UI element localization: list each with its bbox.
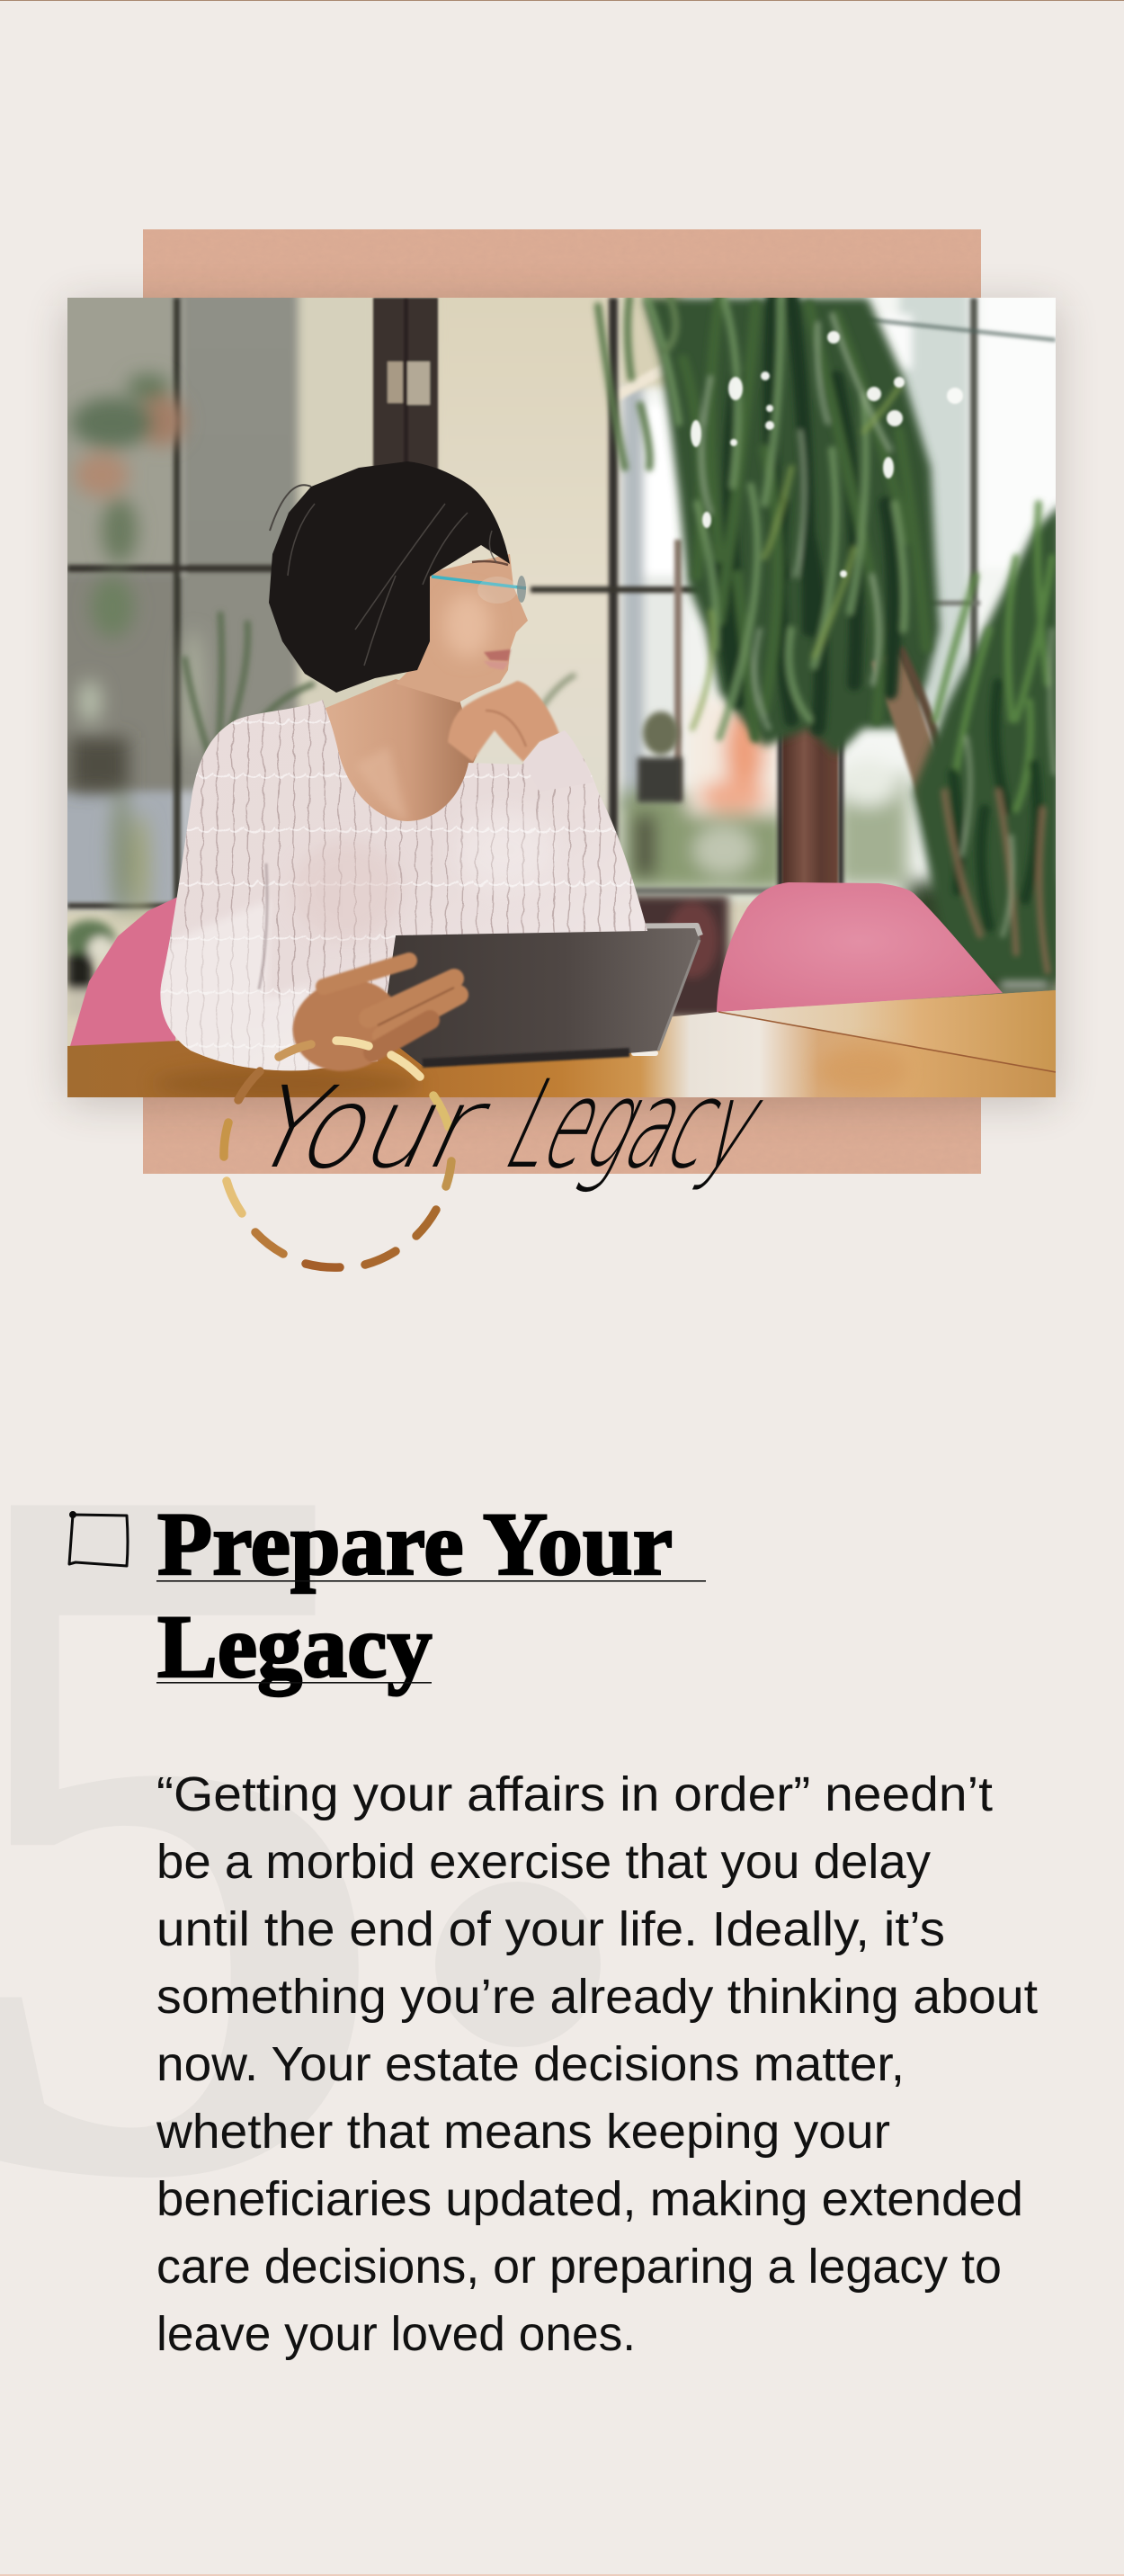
chin hand xyxy=(448,681,559,762)
photo: woman at table with tablet xyxy=(54,289,1065,1102)
tablet xyxy=(360,925,700,1066)
hair xyxy=(269,461,510,693)
body text: now. Your estate decisions matter, xyxy=(156,2037,905,2091)
body text: care decisions, or preparing a legacy to xyxy=(156,2240,1002,2294)
table xyxy=(67,990,1056,1100)
glasses xyxy=(432,577,526,588)
sweater xyxy=(160,700,647,1070)
body text: beneficiaries updated, making extended xyxy=(156,2172,1023,2226)
lower hand xyxy=(282,961,459,1083)
panel: peach paper backing xyxy=(143,229,981,1174)
big plant xyxy=(598,298,963,863)
body text: “Getting your affairs in order” needn’t xyxy=(156,1767,993,1821)
background: window, walls and frames xyxy=(54,289,1065,1017)
woman xyxy=(153,461,656,1079)
body text: be a morbid exercise that you delay xyxy=(156,1835,931,1889)
left chair xyxy=(70,897,178,1048)
bokeh highlights xyxy=(691,331,963,577)
script title: Legacy xyxy=(486,1055,787,1195)
icon: hand-drawn checkbox xyxy=(69,1513,128,1566)
right cuff xyxy=(523,730,593,792)
body text xyxy=(156,1767,1038,2361)
big background numeral xyxy=(0,1267,601,2387)
right chair xyxy=(717,882,1003,1013)
heading: Prepare Your xyxy=(157,1494,673,1594)
script title xyxy=(231,1055,787,1195)
hanging plants left xyxy=(70,374,227,926)
dark pot xyxy=(638,711,682,802)
window frames xyxy=(67,298,1056,912)
body text: whether that means keeping your xyxy=(156,2105,890,2159)
face xyxy=(396,554,528,702)
body text: something you’re already thinking about xyxy=(156,1970,1038,2024)
top rule xyxy=(0,0,1124,1)
icon: gold dashed circle xyxy=(224,1041,451,1267)
door frame xyxy=(373,298,438,478)
heading: Legacy xyxy=(157,1597,432,1696)
script title: Your xyxy=(231,1062,510,1194)
right plant xyxy=(913,504,1061,980)
beam xyxy=(615,368,666,397)
heading xyxy=(156,1494,706,1696)
body text: leave your loved ones. xyxy=(156,2307,636,2361)
neck and chest xyxy=(324,679,477,821)
body text: until the end of your life. Ideally, it’s xyxy=(156,1902,945,1956)
